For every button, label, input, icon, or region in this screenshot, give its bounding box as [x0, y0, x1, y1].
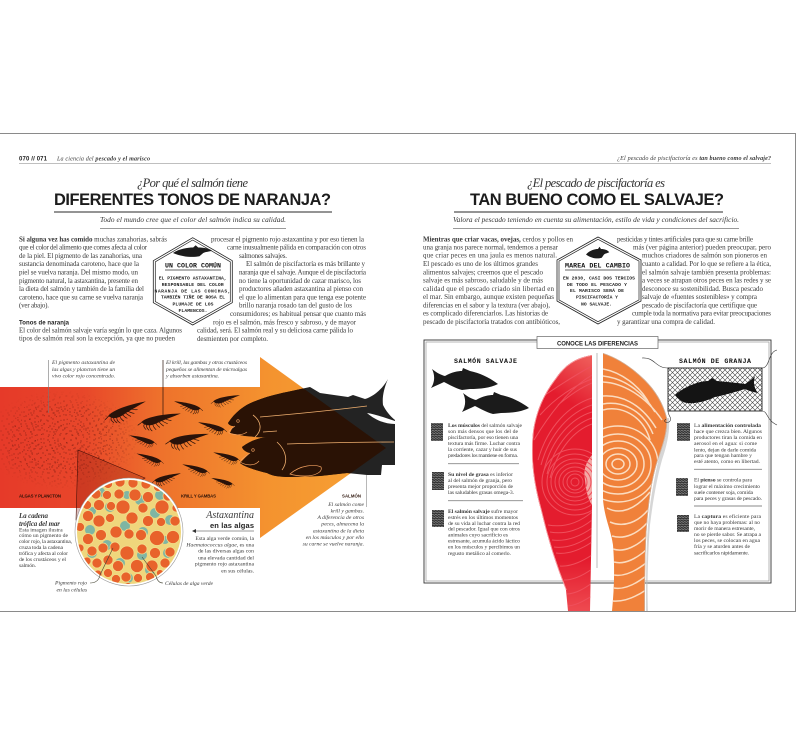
- text: la cadena trófica: color rojo, la astaxantina,: [19, 539, 73, 545]
- callout hexagon: marea del cambio: NO SALVAJE.: [581, 301, 612, 307]
- text: astaxantina en las algas: de las diversas algas con: [198, 549, 254, 555]
- right body text column 2: pescado de piscifactoría que certifique que: [642, 301, 757, 309]
- annotation: salmon: krill y gambas.: [331, 508, 364, 514]
- left body text column 2: El salmón de piscifactoría es más brillante y: [246, 260, 366, 268]
- farm text 1: lento, dejan de darle comida: [694, 448, 756, 454]
- wild text 3: en los músculos y percibimos un: [448, 544, 520, 550]
- text: astaxantina en las algas: Haematococcus algae, es una: [185, 542, 254, 548]
- wild text 2: las saludables grasas omega-3.: [448, 490, 515, 496]
- farm text 2: El pienso se controla para: [694, 478, 752, 484]
- text: la cadena trófica: cruza toda la cadena: [19, 545, 63, 551]
- wild text 2: Su nivel de grasa es inferior: [448, 471, 513, 478]
- panel title tab: [537, 336, 658, 348]
- panel title tab: CONOCE LAS DIFERENCIAS: [557, 342, 638, 348]
- left body text column 2: [197, 235, 367, 343]
- left body text column 1: Si alguna vez has comido muchas zanahorias, sabrás: [19, 235, 167, 243]
- wild text 3: regusto metálico al comerlo.: [448, 551, 512, 557]
- right body text column 2: desconoce su sostenibilidad. Busca pescado: [642, 285, 764, 293]
- right body text column 1: el mar. Sin embargo, aunque existen pequeñas: [423, 293, 554, 301]
- farm text 1: aerosol en el agua: si come: [694, 441, 757, 447]
- wild text 1: piscifactoría, por eso tienen una: [448, 434, 518, 441]
- icon: feed texture: [677, 423, 690, 441]
- farm text 3: no se pierde sabor. Se atrapa a: [694, 532, 761, 538]
- right heading: TAN BUENO COMO EL SALVAJE?: [470, 191, 724, 209]
- left body text column 1: piel se vuelva naranja. Del mismo modo, un: [19, 268, 138, 276]
- left body text column 2: carne inusualmente pálida en comparación con otros: [227, 244, 366, 252]
- right body text column 1: diferencias en el sabor y la textura (ver abajo),: [423, 301, 550, 309]
- stage labels: ALGAS Y PLANCTON: [19, 494, 61, 498]
- wild text 3: de su vida al luchar contra la red: [448, 521, 520, 527]
- farm text 2: [676, 478, 763, 502]
- icon: fodder texture: [676, 478, 688, 496]
- callout hexagon: marea del cambio: [557, 237, 641, 324]
- farm text 2: suele contener soja, comida: [694, 490, 753, 496]
- left body text column 2: productores añaden astaxantina al pienso con: [239, 285, 364, 293]
- stage labels: KRILL Y GAMBAS: [181, 494, 216, 498]
- left body text column 2: el que lo alimentan para que tenga ese potente: [239, 293, 366, 301]
- left body text column 2: calidad, será. El salmón real y su deliciosa carne pálida lo: [197, 327, 354, 335]
- right body text column 1: calidad que el pescado criado sin libertad en: [423, 285, 554, 293]
- right body text column 1: es complicado diferenciarlos. Las historias de: [423, 310, 548, 318]
- callout hexagon: marea del cambio: PISCIFACTORÍA Y: [576, 294, 618, 301]
- stage labels: SALMÓN: [342, 494, 361, 498]
- right heading: Valora el pescado teniendo en cuenta su alimentación, estilo de vida y condiciones del sacrificio.: [453, 215, 739, 224]
- farm text 2: para peces y grasas de pescado.: [694, 496, 763, 502]
- wild text 1: la corriente, cazar y huir de sus: [448, 447, 518, 453]
- farm text 3: que no haya problemas: al no: [694, 520, 760, 526]
- annotation: krill: El krill, las gambas y otras crustáceos: [165, 360, 247, 366]
- text: astaxantina en las algas: pigmento rojo astaxantina: [195, 562, 254, 568]
- wild text 2: al del salmón de granja, pero: [448, 478, 512, 484]
- callout hexagon: un color común: [153, 238, 232, 325]
- caption: pigmento rojo: en las células: [57, 588, 87, 594]
- farm text 3: [677, 513, 761, 556]
- icon: capture texture: [677, 515, 689, 532]
- text: la cadena trófica: de los crustáceos y el: [19, 557, 66, 563]
- text: la cadena trófica: Esta imagen ilustra: [19, 528, 63, 534]
- wild text 1: Los músculos del salmón salvaje: [448, 423, 522, 429]
- left body text column 1: El color del salmón salvaje varía según lo que caza. Algunos: [19, 326, 182, 334]
- wild text 2: presenta mejor proporción de: [448, 484, 513, 490]
- right body text column 1: una granja nos parece normal, tendemos a pensar: [423, 244, 559, 252]
- running header left: La ciencia del pescado y el marisco: [56, 156, 150, 162]
- right body text column 2: pesticidas y tintes artificiales para que su carne brille: [617, 235, 753, 243]
- farm text 2: lograr el máximo crecimiento: [694, 484, 760, 490]
- food chain diagram: [0, 357, 395, 594]
- caption: células de alga verde: Células de alga verde: [165, 581, 214, 587]
- farm text 3: los peces, se colocan en agua: [694, 538, 760, 544]
- text: astaxantina en las algas: Astaxantina: [205, 510, 254, 521]
- callout hexagon: un color común: TAMBIÉN TIÑE DE ROSA EL: [161, 294, 225, 301]
- farm text 3: morir de manera estresante,: [694, 526, 756, 532]
- callout hexagon: un color común: UN COLOR COMÚN: [165, 260, 221, 270]
- annotation: algae pigment: las algas y plancton tiene un: [52, 367, 115, 373]
- text: astaxantina en las algas: en las algas: [210, 521, 254, 530]
- right body text column 2: más (ver página anterior) pueden preocupar, pero: [633, 244, 772, 252]
- left body text column 2: brillo naranja rosado tan del gusto de los: [239, 302, 352, 310]
- annotation: salmon: peces, almacena la: [320, 522, 364, 528]
- right body text column 2: salvaje de «fuentes sostenibles» y compra: [642, 293, 758, 301]
- left body text column 1: pigmento natural, la astaxantina, presente en: [19, 277, 138, 285]
- right body text column 2: el salmón salvaje también presenta problemas:: [642, 268, 771, 276]
- caption: pigmento rojo: [54, 580, 87, 594]
- icon: fish: [173, 245, 212, 257]
- left heading: ¿Por qué el salmón tiene: [137, 176, 248, 190]
- left body text column 2: naranja que el salvaje. Aunque el de piscifactoría: [239, 268, 367, 276]
- farm text 1: para que tengan hambre y: [694, 453, 752, 459]
- farm text 1: [677, 423, 763, 465]
- left body text column 2: no tiene la oportunidad de cazar marisco, los: [239, 277, 361, 285]
- photo: farmed salmon steak: [603, 353, 670, 611]
- left body text column 2: salmones salvajes.: [239, 252, 287, 260]
- icon: wild salmon silhouettes: [431, 368, 529, 414]
- text: astaxantina en las algas: [185, 510, 255, 575]
- farm text 1: La alimentación controlada: [694, 423, 761, 429]
- right body text column 1: alimentos salvajes; creemos que el pescado: [423, 268, 544, 276]
- right body text column 1: [423, 235, 574, 326]
- callout hexagon: un color común: FLAMENCOS.: [178, 308, 208, 314]
- plankton dots: [0, 392, 136, 488]
- left body text column 1: sustancia denominada caroteno, hace que la: [19, 260, 140, 268]
- left body text column 1: que el color del alimento que comes afecta al color: [19, 244, 148, 252]
- farm text 1: esté atento, como en libertad.: [694, 459, 761, 465]
- icon: muscle texture: [431, 423, 443, 441]
- left body text column 1: [19, 235, 182, 343]
- running header right: ¿El pescado de piscifactoría es tan bueno como el salvaje?: [617, 155, 771, 162]
- wild text 3: estrés en los últimos momentos: [448, 515, 519, 521]
- icon: stress texture: [432, 510, 444, 527]
- krill swarm: [103, 395, 242, 489]
- farm text 3: fría y se aturden antes de: [694, 543, 750, 550]
- right body text column 2: [617, 235, 772, 326]
- annotation: krill: pequeños se alimentan de microalgas: [165, 367, 247, 373]
- left body text column 1: (ver abajo).: [19, 302, 49, 310]
- comparison panel: [424, 336, 777, 615]
- icon: fat texture: [432, 472, 444, 490]
- arrow: food chain gradient: [0, 357, 386, 538]
- left body text column 2: desmienten por completo.: [197, 335, 268, 343]
- left body text column 1: de la piel. El pigmento de las zanahorias, una: [19, 252, 143, 260]
- left body text column 2: consumidores; es habitual pensar que cuanto más: [230, 310, 366, 318]
- left heading: [54, 176, 332, 228]
- callout hexagon: un color común: PLUMAJE DE LOS: [172, 301, 214, 307]
- leader lines: [48, 360, 50, 413]
- wild text 1: son más densos que los del de: [448, 429, 518, 435]
- callout hexagon: marea del cambio: EL MARISCO SERÁ DE: [570, 287, 624, 294]
- callout hexagon: marea del cambio: EN 2030, CASI DOS TERCIOS: [563, 276, 635, 282]
- zoom triangle: [76, 450, 145, 520]
- text: la cadena trófica: La cadena: [18, 512, 48, 520]
- farm text 1: productores tiran la comida en: [694, 435, 762, 441]
- right heading: ¿El pescado de piscifactoría es: [527, 176, 665, 190]
- wild text 2: [432, 471, 515, 496]
- left heading: Todo el mundo cree que el color del salmón indica su calidad.: [100, 215, 286, 224]
- text: la cadena trófica: cómo un pigmento de: [19, 533, 68, 539]
- caption: pigmento rojo: Pigmento rojo: [54, 580, 87, 586]
- wild text 3: del pescador. Igual que con otros: [448, 527, 521, 533]
- annotation: salmon: su carne se vuelve naranja.: [303, 542, 364, 548]
- running header left: 070 // 071: [19, 156, 48, 162]
- text: la cadena trófica: salmón.: [19, 563, 37, 569]
- left body text column 1: tipos de salmón real son la excepción, ya que no pueden: [19, 335, 176, 343]
- left body text column 1: Tonos de naranja: [19, 320, 70, 326]
- text: astaxantina en las algas: en sus células.: [221, 569, 255, 575]
- cell magnification circle: [75, 477, 183, 590]
- right body text column 2: a veces se atrapan otros peces en las redes y se: [642, 277, 771, 285]
- annotation: algae pigment: vivo color rojo concentrado.: [52, 374, 115, 380]
- wild text 3: estresante, acumula ácido láctico: [448, 538, 520, 544]
- right body text column 2: cuanto a calidad. Por lo que se refiere a la ética,: [642, 260, 771, 268]
- icon: fish in net: [642, 350, 777, 425]
- text: la cadena trófica: trófica del mar: [19, 520, 60, 528]
- right body text column 1: salvaje es más sabroso, saludable y de más: [423, 277, 543, 285]
- panel frame: [424, 340, 771, 583]
- annotation: krill: y absorben astaxantina.: [165, 374, 219, 380]
- right body text column 1: que criar peces en una jaula es menos natural.: [423, 252, 557, 260]
- annotation: salmon: astaxantina de la dieta: [313, 528, 364, 534]
- annotation: salmon: El salmón come: [327, 502, 365, 508]
- left body text column 1: la dieta del salmón y también de la familia del: [19, 285, 144, 293]
- left heading: DIFERENTES TONOS DE NARANJA?: [54, 191, 331, 209]
- stage labels: [19, 494, 361, 498]
- left body text column 1: caroteno, hace que su carne se vuelva naranja: [19, 293, 144, 301]
- annotation: krill: [165, 360, 247, 380]
- text: astaxantina en las algas: Esta alga verde común, la: [195, 536, 254, 542]
- callout hexagon: un color común: NARANJA DE LAS CONCHAS,: [154, 288, 230, 294]
- farm text 3: La captura es eficiente para: [694, 513, 761, 520]
- right heading: [453, 176, 739, 228]
- annotation: algae pigment: [51, 360, 116, 380]
- callout hexagon: marea del cambio: MAREA DEL CAMBIO: [565, 262, 630, 270]
- wild text 3: [432, 508, 521, 557]
- farm text 3: sacrificarlos rápidamente.: [694, 550, 750, 556]
- icon: fish: [586, 247, 609, 258]
- farm text 1: hace que crezca bien. Algunos: [694, 429, 763, 435]
- wild text 1: textura más firme. Luchar contra: [448, 440, 520, 447]
- callout hexagon: marea del cambio: DE TODO EL PESCADO Y: [567, 282, 627, 288]
- left body text column 2: rojo es el salmón, más fresco y sabroso, y de mayor: [213, 318, 357, 326]
- annotation: salmon: en los músculos y por ello: [306, 535, 364, 541]
- wild heading: SALMÓN SALVAJE: [454, 356, 517, 365]
- infographic spread: [0, 133, 796, 612]
- left body text column 2: procesar el pigmento rojo astaxantina y por eso tienen la: [211, 235, 365, 243]
- text: astaxantina en las algas: una elevada cantidad del: [198, 555, 254, 561]
- annotation: salmon: [303, 502, 365, 548]
- right body text column 2: muchos criadores de salmón son pioneros en: [642, 252, 768, 260]
- right body text column 2: y garantizar una compra de calidad.: [617, 318, 715, 326]
- wild text 1: [431, 423, 522, 459]
- text: la cadena trófica: [18, 512, 73, 569]
- right body text column 1: Mientras que criar vacas, ovejas, cerdos y pollos en: [423, 235, 574, 243]
- right body text column 1: pescado de piscifactoría tratados con antibióticos,: [423, 318, 560, 326]
- wild text 3: animales cuyo sacrificio es: [448, 532, 509, 539]
- wild text 3: El salmón salvaje sufre mayor: [448, 508, 518, 515]
- salmon pair: [228, 379, 395, 477]
- photo: wild salmon steak: [532, 355, 592, 611]
- farm heading: SALMÓN DE GRANJA: [679, 356, 751, 365]
- annotation: salmon: A diferencia de otros: [316, 514, 364, 521]
- right body text column 2: cumple toda la normativa para evitar preocupaciones: [632, 310, 771, 318]
- annotation: algae pigment: El pigmento astaxantina de: [51, 360, 116, 366]
- right body text column 1: El pescado es uno de los últimos grandes: [423, 260, 538, 268]
- callout hexagon: un color común: EL PIGMENTO ASTAXANTINA,: [159, 276, 227, 282]
- callout hexagon: un color común: RESPONSABLE DEL COLOR: [162, 282, 224, 288]
- text: la cadena trófica: trófica y afecta al color: [19, 550, 68, 557]
- wild text 1: predadores los mantiene en forma.: [448, 452, 519, 459]
